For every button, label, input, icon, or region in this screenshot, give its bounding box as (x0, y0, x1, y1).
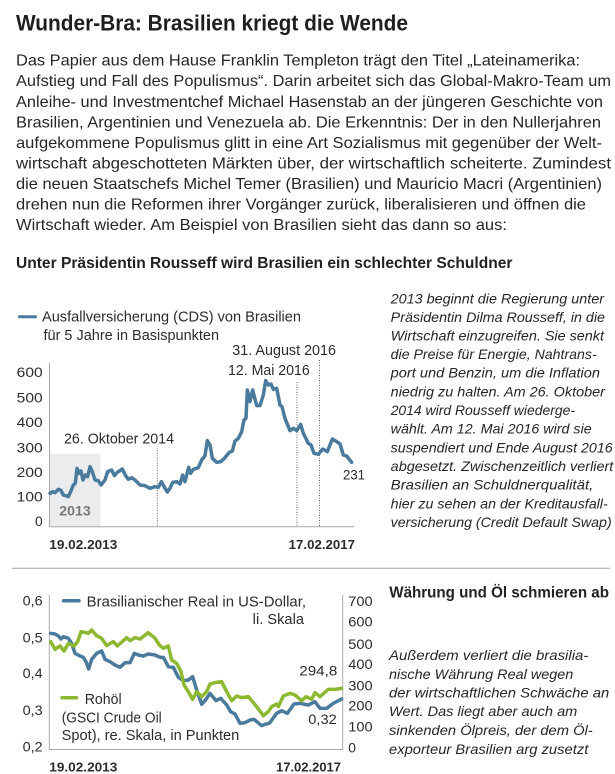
title: Wunder-Bra: Brasilien kriegt die Wende (16, 11, 408, 36)
event labels: 12. Mai 2016 (228, 363, 310, 379)
end value: 231 (343, 467, 365, 482)
side text: section 2: nische Währung Real wegen (389, 666, 574, 682)
side text: section 1: Präsidentin Dilma Rousseff, in die (391, 309, 605, 325)
right axis labels (348, 594, 373, 755)
left axis labels: 0,6 (23, 594, 43, 609)
intro text block: aufgekommene Populismus glitt in eine Art Sozialismus mit gegenüber der Welt- (16, 135, 602, 152)
intro text block (15, 53, 612, 234)
left axis labels: 0,5 (23, 630, 43, 646)
line chart: CDS Brazil (17, 310, 365, 552)
y axis labels: 300 (17, 440, 43, 456)
heading: section 1: Unter Präsidentin Rousseff wird Brasilien ein schlechter Schuldner (16, 255, 512, 272)
side text: section 2: sinkenden Ölpreis, der dem Öl- (389, 721, 593, 738)
right axis labels: 500 (348, 637, 373, 652)
event labels: 26. Oktober 2014 (64, 431, 174, 447)
side text: section 1: hier zu sehen an der Kreditausfall- (391, 495, 608, 511)
side text: section 1: 2013 beginnt die Regierung unter (390, 290, 605, 306)
intro text block: Anleihe- und Investmentchef Michael Hasenstab an der jüngeren Geschichte von (16, 94, 603, 111)
crude oil data line (51, 630, 342, 716)
y axis labels: 100 (17, 490, 43, 505)
side text: section 1: Wirtschaft einzugreifen. Sie senkt (391, 328, 605, 344)
side text: section 1: wählt. Am 12. Mai 2016 wird sie (391, 420, 592, 436)
left axis labels: 0,4 (23, 666, 43, 681)
heading: section 2: Währung und Öl schmieren ab (389, 582, 609, 601)
real end value: 0,32 (308, 712, 337, 727)
right axis labels: 0 (348, 740, 356, 755)
y axis labels: 400 (17, 415, 43, 430)
side text: section 1: die Preise für Energie, Nahtrans- (391, 346, 597, 362)
legend: real: li. Skala (253, 612, 305, 628)
right axis labels: 300 (348, 679, 373, 694)
legend: CDS (20, 310, 301, 344)
legend: real (64, 595, 306, 628)
side text: section 2: Außerdem verliert die brasilia- (388, 647, 589, 663)
y axis labels: 0 (35, 514, 43, 529)
side text: section 1: niedrig zu halten. Am 26. Oktober (391, 383, 606, 399)
event labels: 31. August 2016 (232, 343, 336, 359)
side text: section 1: versicherung (Credit Default Swap) (391, 514, 612, 530)
legend: real: Brasilianischer Real in US-Dollar, (87, 595, 306, 611)
oil end value: 294,8 (299, 664, 337, 679)
side text: section 1: 2014 wird Rousseff wiederge- (390, 402, 575, 418)
y axis labels: 500 (17, 390, 43, 406)
intro text block: drehen nun die Reformen ihrer Vorgänger zurück, liberalisieren und öffnen die (16, 196, 586, 214)
legend: crude oil: Rohöl (85, 692, 122, 708)
event labels (64, 343, 336, 447)
right axis labels: 400 (348, 657, 373, 672)
side text: section 1: Brasilien an Schuldnerqualität, (391, 477, 593, 493)
legend: crude oil: (GSCI Crude Oil (62, 710, 162, 726)
legend: crude oil (62, 692, 239, 744)
CDS data line (50, 381, 352, 497)
y axis labels: 600 (17, 365, 43, 380)
line chart: real and crude oil (23, 594, 373, 774)
left axis labels: 0,3 (23, 703, 43, 718)
intro text block: die neuen Staatschefs Michel Temer (Brasilien) und Mauricio Macri (Argentinien) (16, 176, 602, 193)
intro text block: wirtschaft abgeschotteten Märkten über, der wirtschaftlich scheiterte. Zumindest (15, 155, 612, 172)
side text: section 1 (390, 290, 614, 530)
date labels: 17.02.2017 (289, 538, 355, 552)
side text: section 2 (388, 647, 610, 757)
side text: section 2: exporteur Brasilien arg zusetzt (389, 741, 589, 757)
y axis labels: 200 (17, 465, 43, 480)
y axis labels (17, 365, 43, 529)
real data line (51, 633, 342, 726)
right axis labels: 600 (348, 615, 373, 630)
intro text block: Brasilien, Argentinien und Venezuela ab. Die Erkenntnis: Der in den Nullerjahren (16, 114, 601, 131)
left axis labels: 0,2 (23, 740, 43, 755)
date labels (49, 761, 341, 774)
legend: crude oil: Spot), re. Skala, in Punkten (62, 728, 239, 744)
side text: section 1: port und Benzin, um die Inflation (390, 365, 600, 381)
intro text block: Das Papier aus dem Hause Franklin Templeton trägt den Titel „Lateinamerika: (16, 53, 580, 70)
side text: section 1: abgesetzt. Zwischenzeitlich verliert (391, 458, 614, 474)
shaded area: 2013 (50, 454, 100, 526)
side text: section 1: suspendiert und Ende August 2016 (391, 440, 613, 456)
date labels: 19.02.2013 (49, 538, 117, 552)
legend: CDS: Ausfallversicherung (CDS) von Brasilien (42, 310, 301, 326)
side text: section 2: der wirtschaftlichen Schwäche an (389, 684, 610, 700)
intro text block: Wirtschaft wieder. Am Beispiel von Brasilien sieht das dann so aus: (16, 217, 507, 234)
shaded area: 2013: 2013 (59, 504, 91, 519)
right axis labels: 700 (348, 594, 373, 609)
date labels (49, 538, 355, 552)
side text: section 2: Wert. Das liegt aber auch am (389, 703, 578, 719)
right axis labels: 100 (348, 720, 373, 735)
left axis labels (23, 594, 43, 755)
right axis labels: 200 (348, 699, 373, 714)
legend: CDS: für 5 Jahre in Basispunkten (44, 328, 219, 344)
intro text block: Aufstieg und Fall des Populismus“. Darin arbeitet sich das Global-Makro-Team um (16, 73, 611, 90)
